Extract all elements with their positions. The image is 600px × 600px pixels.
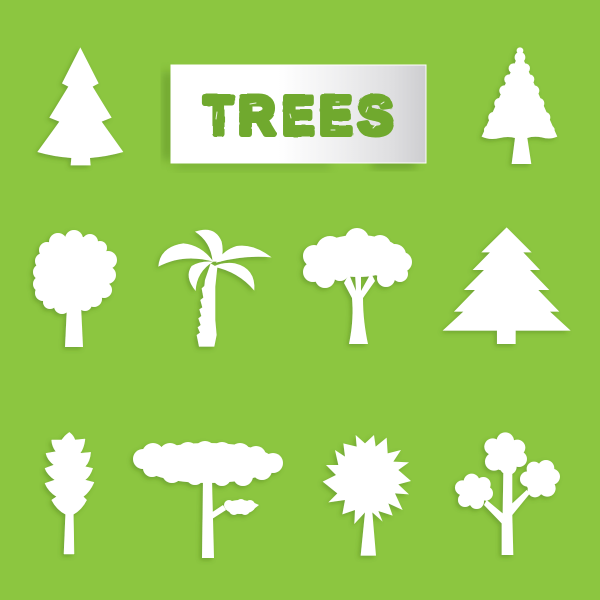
title text: E — [282, 86, 314, 146]
icon: three cluster tree — [455, 432, 560, 555]
title text: E — [320, 86, 352, 146]
icon: round scalloped tree — [33, 230, 117, 347]
title speckles — [216, 102, 384, 131]
icon: large tiered fir tree — [443, 227, 571, 344]
title banner — [164, 65, 426, 168]
title text: R — [238, 86, 275, 146]
icon: oak leaf shaped tree — [45, 432, 94, 554]
icon: umbrella acacia tree — [133, 441, 283, 558]
icon: palm tree — [158, 230, 272, 347]
title text: S — [358, 86, 393, 146]
icon: spiky sun-shaped tree — [323, 435, 411, 556]
title text — [204, 86, 393, 146]
icon: broad canopy tree — [303, 228, 412, 344]
icon: fir tree with curved tiers — [37, 47, 123, 165]
title text: T — [204, 86, 233, 146]
small side canopy — [224, 499, 259, 515]
icon: scalloped pine tree — [482, 47, 557, 164]
